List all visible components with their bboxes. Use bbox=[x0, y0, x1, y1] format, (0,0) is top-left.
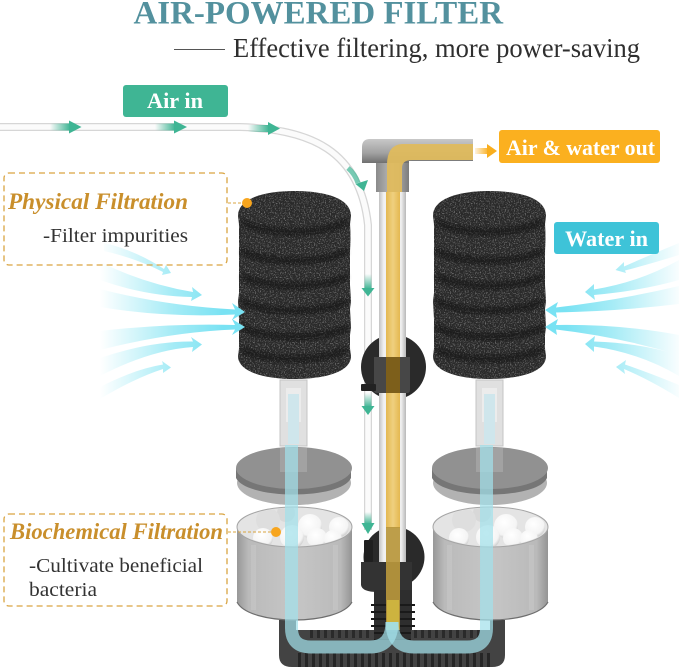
label: Water in bbox=[554, 222, 659, 254]
label: Air in: Air in bbox=[147, 88, 203, 113]
callout: physical filtration: Physical Filtration bbox=[7, 189, 188, 214]
water arrows left bbox=[100, 243, 245, 399]
callout: biochemical filtration: bacteria bbox=[29, 579, 97, 601]
water arrows right bbox=[545, 243, 679, 398]
callout: physical filtration bbox=[4, 173, 227, 265]
arrow: air flow 3 bbox=[248, 122, 280, 135]
label: Water in: Water in bbox=[565, 226, 648, 251]
upper connector on riser bbox=[361, 357, 410, 393]
left filter body bbox=[236, 380, 352, 620]
arrow: air flow 6 bbox=[362, 393, 374, 415]
arrow: air flow 5 bbox=[362, 274, 374, 296]
lower connector and clip bbox=[361, 527, 412, 642]
water flow inside left bbox=[292, 445, 392, 647]
callout: biochemical filtration: -Cultivate beneficial bbox=[29, 555, 203, 577]
outlet head bbox=[362, 139, 473, 192]
callout: biochemical filtration: Biochemical Filtration bbox=[9, 519, 223, 544]
right sponge bbox=[433, 191, 546, 379]
arrow: air flow 4 bbox=[348, 168, 368, 191]
central riser tube bbox=[379, 188, 406, 563]
right filter body bbox=[432, 380, 548, 620]
callout: physical filtration: -Filter impurities bbox=[43, 225, 188, 247]
label: Air and water out: Air & water out bbox=[506, 135, 656, 160]
arrow: air flow 7 bbox=[362, 512, 374, 534]
arrow: air flow 2 bbox=[155, 120, 187, 134]
label: Air in bbox=[123, 85, 228, 117]
manifold base bbox=[279, 620, 505, 667]
air inlet tube bbox=[0, 127, 368, 530]
suction cup: upper back bbox=[361, 334, 426, 400]
suction cup: lower back bbox=[364, 526, 424, 588]
callout pointer: physical bbox=[228, 198, 252, 208]
callout pointer: biochemical bbox=[228, 527, 281, 537]
arrow: air flow 1 bbox=[50, 120, 82, 134]
subtitle: Effective filtering, more power-saving bbox=[233, 33, 640, 63]
water flow inside right bbox=[392, 445, 486, 647]
left sponge bbox=[238, 191, 351, 379]
callout: biochemical filtration bbox=[4, 514, 227, 606]
arrow: water out bbox=[475, 144, 497, 158]
